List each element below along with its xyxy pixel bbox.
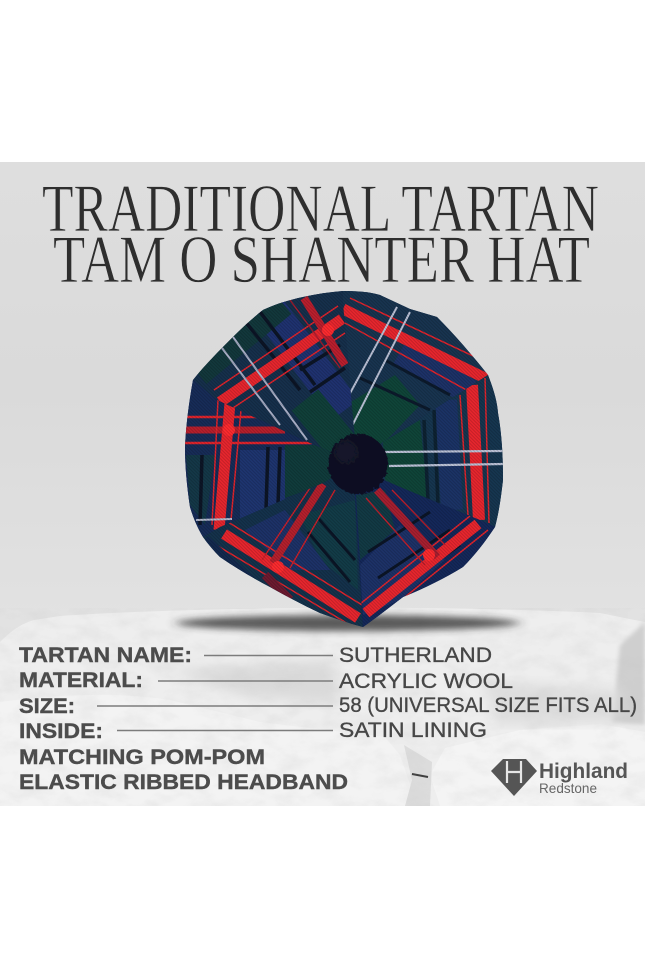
spec labels: MATERIAL: <box>19 669 143 692</box>
hat <box>180 285 510 635</box>
spec labels: MATCHING POM-POM <box>19 746 265 769</box>
panel: left <box>185 380 332 537</box>
spec labels: INSIDE: <box>19 720 103 743</box>
panel: top right <box>343 291 488 444</box>
panel: bottom right <box>355 480 495 627</box>
background panel <box>0 162 645 806</box>
hat shadow <box>176 615 520 631</box>
spec values: 58 (UNIVERSAL SIZE FITS ALL) <box>339 694 637 717</box>
panel: top left <box>193 291 354 452</box>
logo: Highland Redstone: Redstone <box>539 780 597 796</box>
logo: Highland Redstone <box>491 759 628 796</box>
icon: diamond <box>491 759 537 796</box>
pom-pom <box>328 434 388 494</box>
spec labels: TARTAN NAME: <box>19 644 192 667</box>
panel: bottom left <box>203 478 362 627</box>
logo: Highland Redstone: Highland <box>539 760 628 783</box>
spec labels: SIZE: <box>19 695 75 718</box>
infographic canvas <box>0 162 645 806</box>
spec labels: ELASTIC RIBBED HEADBAND <box>19 771 348 794</box>
spec values <box>339 644 637 742</box>
title <box>42 170 599 297</box>
spec values: SATIN LINING <box>339 719 487 742</box>
spec values: ACRYLIC WOOL <box>339 670 513 693</box>
twill weave <box>180 285 510 630</box>
rock base <box>0 608 645 806</box>
spec values: SUTHERLAND <box>339 644 492 667</box>
panel: right <box>380 375 503 527</box>
spec lines <box>97 656 333 730</box>
spec labels <box>19 644 348 794</box>
